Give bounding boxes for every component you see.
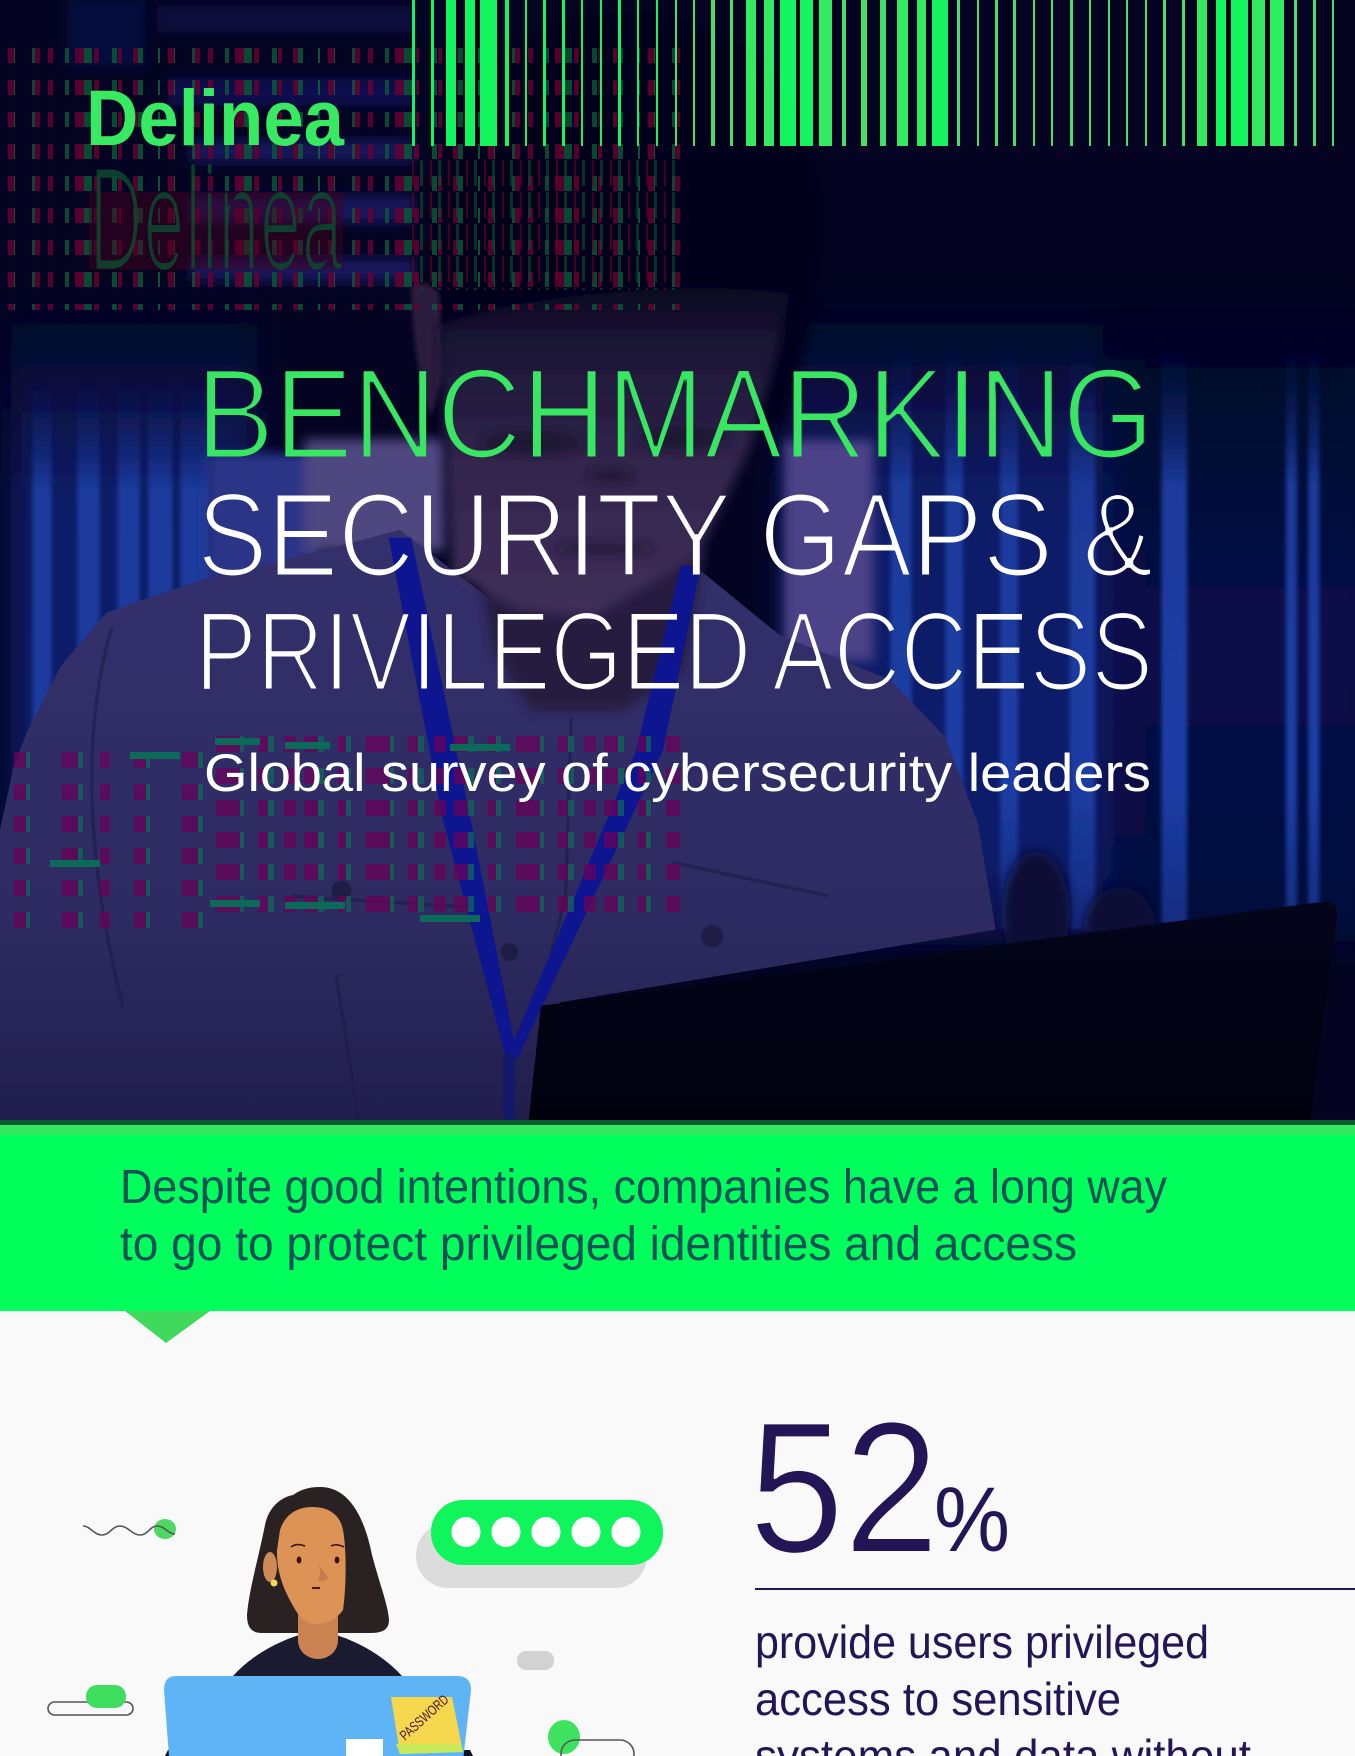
hero photo: man at laptop in a server room — [0, 0, 1355, 1120]
laptop base corners — [158, 1750, 480, 1756]
subtitle: Global survey of cybersecurity leaders — [204, 744, 1151, 803]
statistic divider — [755, 1588, 1355, 1590]
illustration: woman at laptop with password — [48, 1487, 663, 1756]
sticky note: PASSWORD — [396, 1691, 452, 1743]
photo: shirt — [0, 530, 996, 1120]
photo background: blue curtain folds — [32, 336, 1319, 930]
photo: laptop — [529, 902, 1337, 1120]
title: SECURITY GAPS & — [197, 469, 1153, 602]
neck — [298, 1610, 338, 1659]
ghost logo: Delinea — [89, 137, 343, 302]
torso — [233, 1630, 402, 1676]
banner text: Despite good intentions, companies have a long way — [120, 1161, 1167, 1214]
laptop — [164, 1676, 471, 1756]
photo: face — [440, 288, 790, 617]
laptop cutout — [346, 1739, 383, 1756]
title: PRIVILEGED ACCESS — [195, 589, 1153, 714]
decoration: wave and dot — [83, 1519, 176, 1539]
percent sign: % — [934, 1469, 1010, 1571]
decoration: right dot and pill — [548, 1720, 634, 1756]
photo: lanyard clip — [503, 1053, 515, 1120]
password field — [416, 1500, 663, 1588]
photo: ear — [411, 283, 445, 417]
photo: silhouettes behind laptop — [1002, 851, 1156, 974]
statistic: 52% — [749, 1383, 1010, 1592]
barcode graphic — [412, 0, 1334, 146]
green banner — [0, 1120, 1355, 1343]
decoration: left pill and blob — [48, 1685, 133, 1715]
Delinea logo: Delinea — [86, 73, 345, 162]
sticky note — [391, 1691, 463, 1754]
photo: eyes and nose shadows — [482, 426, 728, 553]
face — [277, 1507, 346, 1624]
glitch artefacts behind subtitle — [0, 736, 680, 928]
photo: shirt buttons — [332, 880, 724, 961]
statistic description: provide users privileged — [755, 1616, 1209, 1668]
photo background: window blinds — [67, 0, 414, 282]
brows, eyes, nose, mouth — [291, 1545, 344, 1589]
green banner: to go to protect privileged identities and access — [120, 1218, 1077, 1271]
glitch artefacts behind logo — [8, 48, 680, 310]
statistic description — [755, 1616, 1251, 1756]
photo: shirt placket and pocket shadows — [92, 627, 829, 1120]
earring — [270, 1580, 278, 1586]
ear — [263, 1552, 277, 1582]
hair — [247, 1487, 389, 1633]
photo background: lit panels behind head — [207, 439, 874, 661]
photo: lanyard — [389, 538, 701, 1058]
title — [195, 343, 1154, 714]
photo: hair — [428, 13, 823, 448]
photo: neck and collar — [482, 549, 706, 711]
woman — [233, 1487, 402, 1676]
banner pointer — [125, 1311, 210, 1343]
statistic description: access to sensitive — [755, 1673, 1121, 1725]
title: BENCHMARKING — [196, 343, 1154, 486]
decoration: grey pill — [517, 1651, 554, 1670]
photo background: blue curtain base — [11, 302, 1355, 941]
number: 52 — [749, 1383, 939, 1592]
